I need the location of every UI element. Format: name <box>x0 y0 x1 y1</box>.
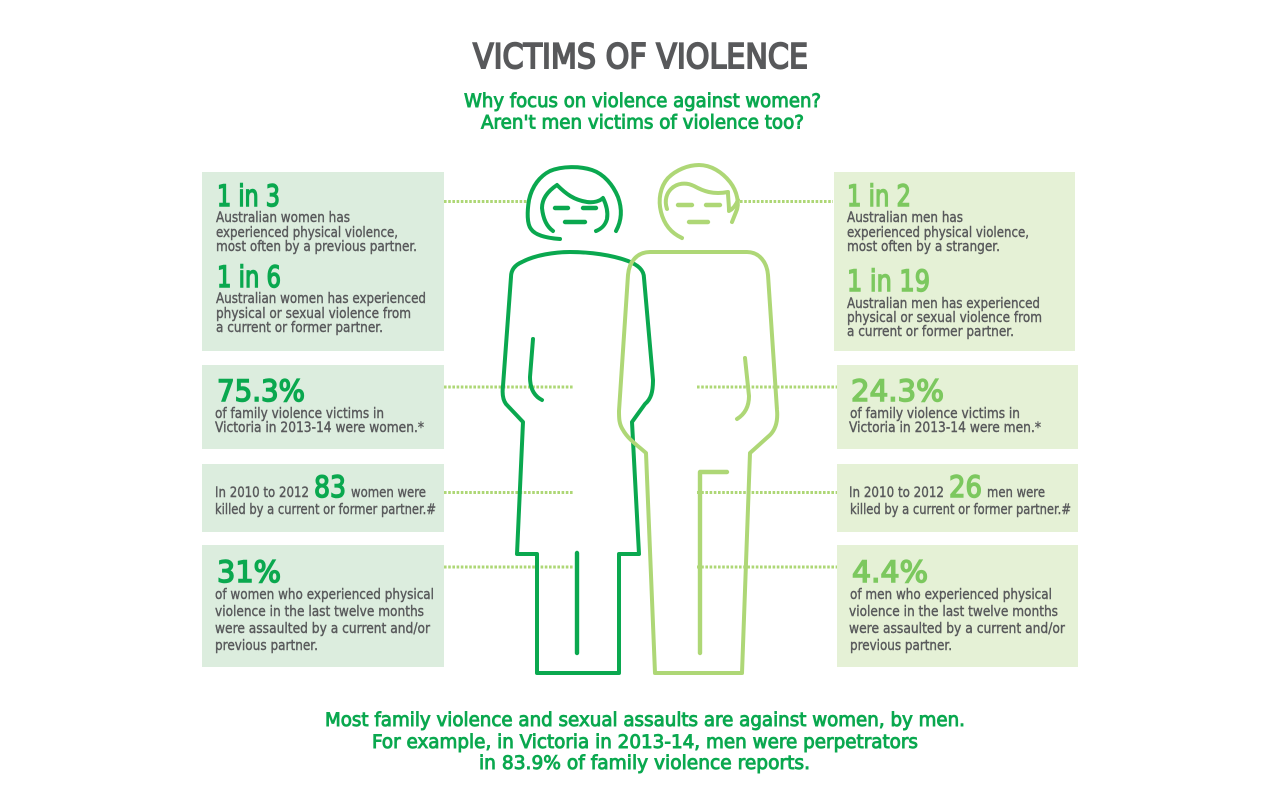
panel: men 4.4%: were assaulted by a current and/or <box>849 621 1065 637</box>
icon: woman figure <box>503 167 653 673</box>
panel: women 31%: previous partner. <box>215 638 318 654</box>
panel: women 1 in 3 and 1 in 6: a current or former partner. <box>216 320 383 336</box>
panel: men 4.4%: previous partner. <box>850 638 952 654</box>
man leg <box>700 472 727 653</box>
panel: men 26 killed: 26 <box>949 470 982 504</box>
panel: men 26 killed: men were <box>987 485 1045 501</box>
title: VICTIMS OF VIOLENCE <box>473 37 808 76</box>
woman hair outline <box>528 167 621 239</box>
panel: men 1 in 2 and 1 in 19: most often by a stranger. <box>847 239 1000 255</box>
panel: men 4.4%: 4.4% <box>852 555 928 589</box>
subtitle: Why focus on violence against women? <box>464 91 821 112</box>
panel: women 1 in 3 and 1 in 6: Australian women has <box>216 210 350 226</box>
panel: women 1 in 3 and 1 in 6: 1 in 3 <box>217 179 280 213</box>
woman arm <box>530 339 542 400</box>
panel: men 4.4%: violence in the last twelve months <box>849 604 1058 620</box>
panel: women 31% <box>202 545 444 667</box>
panel: men 1 in 2 and 1 in 19: 1 in 19 <box>847 264 930 298</box>
panel: men 1 in 2 and 1 in 19: a current or former partner. <box>847 324 1014 340</box>
panel: women 1 in 3 and 1 in 6: experienced physical violence, <box>216 225 398 241</box>
panel: men 1 in 2 and 1 in 19: Australian men has <box>847 210 963 226</box>
man hair <box>666 184 738 211</box>
woman body <box>503 252 653 673</box>
panel: women 75.3%: 75.3% <box>217 374 305 408</box>
panel: men 26 killed: killed by a current or former partner.# <box>850 502 1071 518</box>
subtitle: Aren't men victims of violence too? <box>481 112 804 134</box>
panel: women 75.3%: of family violence victims in <box>215 406 384 422</box>
panel: women 31%: were assaulted by a current and/or <box>215 621 430 637</box>
subtitle <box>464 91 821 134</box>
woman fringe <box>542 185 607 231</box>
panel: women 31%: violence in the last twelve months <box>215 604 424 620</box>
panel: women 83 killed: In 2010 to 2012 <box>215 485 309 501</box>
panel: men 24.3%: of family violence victims in <box>850 406 1020 422</box>
panel: men 24.3%: Victoria in 2013-14 were men.* <box>849 420 1041 436</box>
panel: women 83 killed: women were <box>351 485 426 501</box>
conclusion text: in 83.9% of family violence reports. <box>479 753 810 774</box>
panel: men 24.3%: 24.3% <box>851 374 944 408</box>
panel: men 1 in 2 and 1 in 19: experienced physical violence, <box>847 225 1029 241</box>
panel: men 4.4% <box>837 545 1078 667</box>
panel: women 75.3% <box>202 365 444 449</box>
panel: women 83 killed: killed by a current or former partner.# <box>215 502 436 518</box>
dotted connector lines <box>444 202 837 567</box>
panel: women 1 in 3 and 1 in 6: most often by a previous partner. <box>216 239 417 255</box>
conclusion text: For example, in Victoria in 2013-14, men were perpetrators <box>372 732 918 753</box>
man arm <box>737 358 749 419</box>
panel: men 4.4%: of men who experienced physical <box>850 587 1052 603</box>
panel: women 31%: 31% <box>217 555 281 589</box>
panel: women 31%: of women who experienced physical <box>215 587 434 603</box>
panel: men 1 in 2 and 1 in 19: 1 in 2 <box>847 179 911 213</box>
man head outline <box>660 165 738 238</box>
icon: man figure <box>619 165 777 673</box>
panel: women 1 in 3 and 1 in 6: Australian women has experienced <box>216 291 426 307</box>
man body <box>619 252 777 673</box>
conclusion text: Most family violence and sexual assaults are against women, by men. <box>325 710 965 731</box>
panel: women 83 killed: 83 <box>314 470 346 504</box>
panel: men 26 killed: In 2010 to 2012 <box>849 485 944 501</box>
panel: women 1 in 3 and 1 in 6 <box>202 172 444 351</box>
panel: women 1 in 3 and 1 in 6: physical or sexual violence from <box>216 306 411 322</box>
man face <box>678 205 720 222</box>
woman leg <box>575 553 579 653</box>
panel: men 1 in 2 and 1 in 19 <box>834 172 1075 351</box>
panel: men 1 in 2 and 1 in 19: Australian men has experienced <box>847 296 1040 312</box>
panel: men 24.3% <box>837 365 1078 449</box>
panel: men 1 in 2 and 1 in 19: physical or sexual violence from <box>847 310 1042 326</box>
panel: women 1 in 3 and 1 in 6: 1 in 6 <box>217 260 281 294</box>
panel: women 75.3%: Victoria in 2013-14 were women.* <box>215 420 424 436</box>
panel: women 83 killed <box>202 464 444 532</box>
conclusion text <box>325 710 965 774</box>
woman face <box>555 208 596 222</box>
panel: men 26 killed <box>837 464 1078 532</box>
